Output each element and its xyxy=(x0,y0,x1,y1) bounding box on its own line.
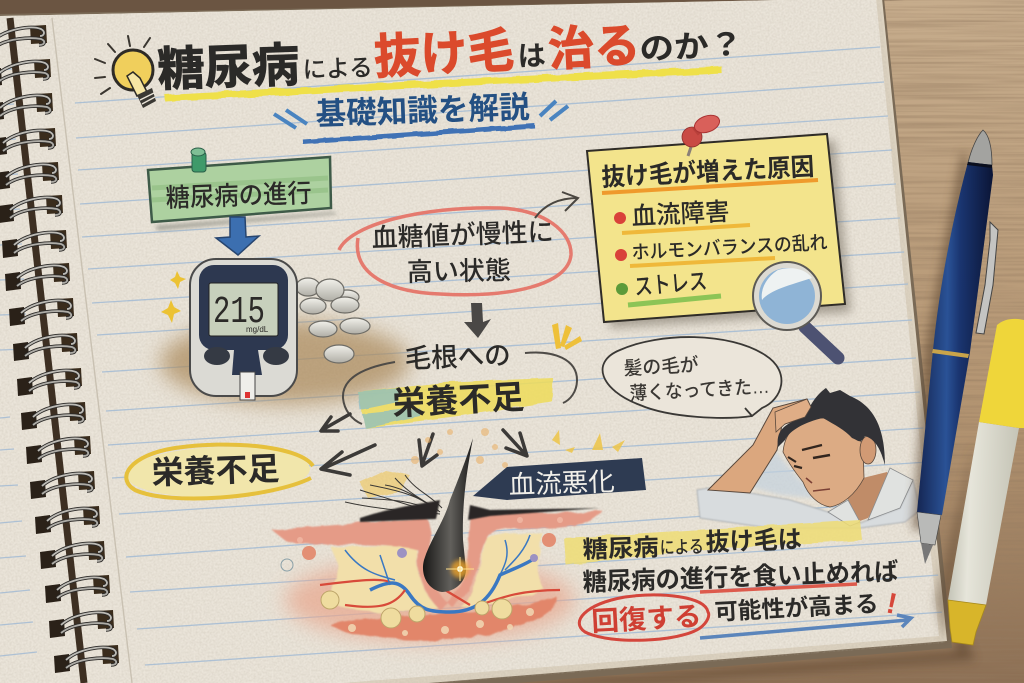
title: 糖尿病 xyxy=(156,38,300,96)
highlight: conclusion xyxy=(564,520,862,565)
pen xyxy=(917,130,998,564)
blurred base xyxy=(285,558,575,642)
callout: conclusion text: 糖尿病 xyxy=(582,534,659,564)
glucose meter: 215 xyxy=(213,291,265,334)
speech bubble: 薄くなってきた… xyxy=(629,376,770,405)
yellow burst xyxy=(552,430,625,453)
subtitle xyxy=(274,90,568,142)
glucose meter xyxy=(190,259,297,400)
bracket around 栄養不足 xyxy=(343,352,577,424)
yellow oval: 栄養不足 xyxy=(125,444,313,500)
speech bubble: 髪の毛が xyxy=(623,354,699,380)
highlight: 栄養不足 band xyxy=(358,378,553,428)
pen shadow xyxy=(912,150,970,530)
spiral binding xyxy=(0,25,119,673)
arrow: down to 毛根 xyxy=(464,303,491,338)
pen clip xyxy=(976,222,998,334)
red oval: 血糖値が慢性に高い状態: 血糖値が慢性に xyxy=(371,217,554,253)
icon: pills xyxy=(296,278,370,363)
arrow: sign to meter xyxy=(216,217,259,255)
panel: 抜け毛が増えた原因 note: 抜け毛が増えた原因 xyxy=(601,152,815,192)
text: 毛根への: 毛根への xyxy=(404,340,511,374)
fat balls xyxy=(321,591,512,628)
ear xyxy=(860,436,876,464)
hand fingers over hair xyxy=(775,399,811,432)
notebook shadow on table xyxy=(0,625,975,683)
forearm and hand xyxy=(708,399,811,493)
title: のか？ xyxy=(639,27,744,67)
collar xyxy=(828,468,913,526)
callout: conclusion text: 可能性が高まる xyxy=(714,590,879,625)
panel: 抜け毛が増えた原因 note xyxy=(587,112,851,328)
skin and fat xyxy=(272,510,602,640)
glint xyxy=(446,557,474,581)
panel: 抜け毛が増えた原因 note: 血流障害 xyxy=(631,198,730,231)
red oval: 回復する: 回復する xyxy=(591,601,702,637)
title xyxy=(156,18,744,96)
arrow: oval to causes note xyxy=(535,192,578,218)
facial features xyxy=(788,445,830,491)
callout: conclusion text: 糖尿病の進行を食い止めれば xyxy=(582,558,899,597)
subtitle: 基礎知識を解説 xyxy=(315,90,530,132)
red oval: 血糖値が慢性に高い状態 xyxy=(339,208,571,295)
title: は xyxy=(517,40,546,72)
splatter around root xyxy=(360,428,508,498)
face xyxy=(783,418,864,507)
dark tag: 血流悪化 xyxy=(473,458,646,500)
panel: 抜け毛が増えた原因 note: ストレス xyxy=(633,268,708,300)
icon: light bulb xyxy=(95,36,156,108)
neck xyxy=(847,472,892,522)
callout: conclusion text: ! xyxy=(884,588,900,621)
vessels xyxy=(320,535,560,612)
margin line and spine xyxy=(10,18,132,683)
red oval: 血糖値が慢性に高い状態: 高い状態 xyxy=(407,255,511,287)
illustration: worried man xyxy=(697,388,920,528)
smudge behind meter xyxy=(160,320,410,404)
speckles xyxy=(297,517,563,636)
title underline xyxy=(165,70,722,98)
callout: conclusion text xyxy=(579,526,911,640)
panel: 糖尿病の進行 sign: 糖尿病の進行 xyxy=(165,178,312,213)
shirt and sleeve xyxy=(697,480,920,528)
icon: red push pin xyxy=(682,112,722,156)
tangled root lines xyxy=(345,475,442,514)
title: による xyxy=(302,55,373,84)
hair xyxy=(778,388,885,465)
panel: 抜け毛が増えた原因 note: ホルモンバランスの乱れ xyxy=(631,232,828,264)
icon: magnifying glass xyxy=(753,262,838,358)
yellow oval: 栄養不足: 栄養不足 xyxy=(151,451,280,491)
title: 抜け毛 xyxy=(373,25,515,85)
title: 治る xyxy=(547,18,641,76)
hair xyxy=(423,438,473,592)
icon: green pin xyxy=(191,148,206,172)
highlighter shadow xyxy=(935,440,975,640)
icon: sparkles xyxy=(161,271,186,323)
callout: conclusion text: による xyxy=(659,536,704,558)
glucose meter: mg/dL xyxy=(246,325,269,334)
red oval: 回復する xyxy=(579,595,709,640)
accent marks xyxy=(552,323,582,350)
wash behind arm xyxy=(725,445,830,500)
panel: 糖尿病の進行 sign xyxy=(148,148,337,230)
dark tag: 血流悪化: 血流悪化 xyxy=(508,466,615,500)
highlighter xyxy=(948,319,1024,645)
callout: conclusion text: 抜け毛は xyxy=(705,526,802,557)
arrow: blue underline xyxy=(700,615,911,638)
speech bubble xyxy=(603,337,781,418)
text: 栄養不足 center: 栄養不足 xyxy=(391,378,525,422)
arrows from center xyxy=(321,414,527,475)
hair root cross-section xyxy=(272,428,625,642)
